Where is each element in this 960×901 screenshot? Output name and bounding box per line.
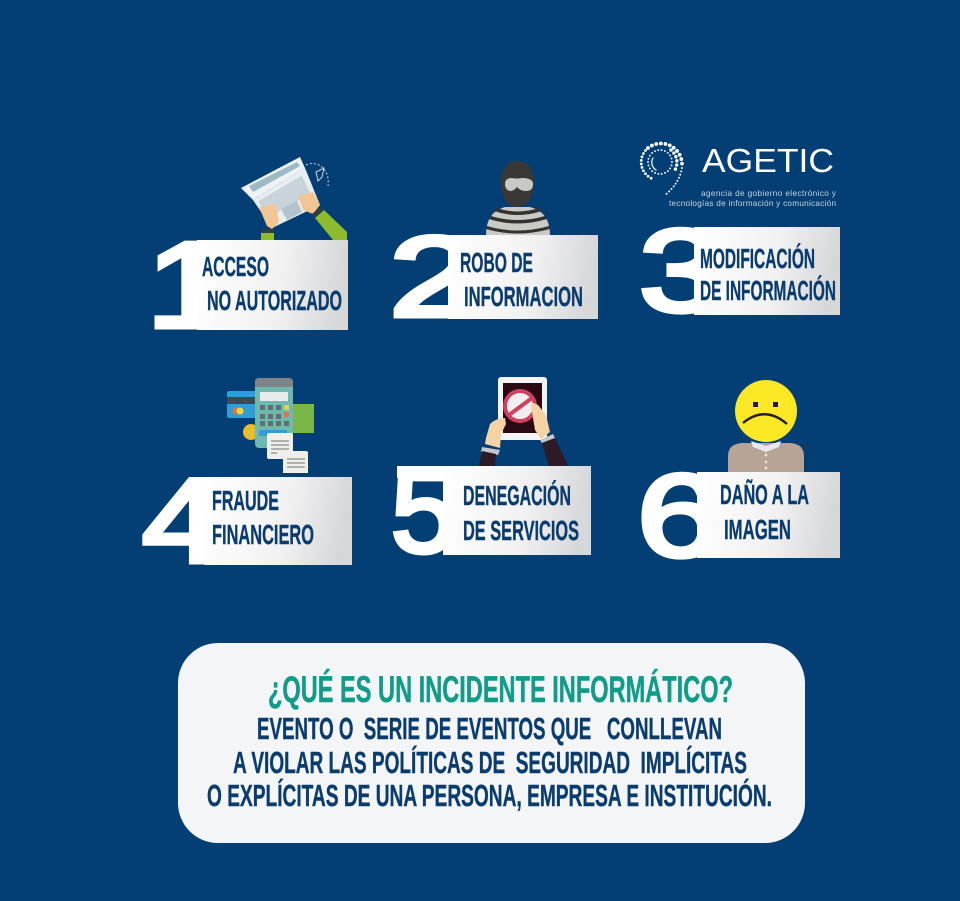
label panel 6 [697,472,840,558]
label text 6 [720,479,809,545]
label text 2: INFORMACION [464,281,583,312]
icon: laptop with hands [241,157,347,240]
label text 1: NO AUTORIZADO [207,285,342,316]
label text 3 [700,243,836,306]
label text 3: MODIFICACIÓN [700,243,815,274]
icon: sad face person [728,380,804,472]
label text 1 [202,251,342,316]
label text 4 [212,485,314,550]
label text 6: IMAGEN [724,514,791,545]
definition body [207,711,772,813]
label panel 2 [448,235,598,319]
top bar of number 5 [397,466,444,478]
label text 2: ROBO DE [460,247,533,278]
logo tagline: tecnologías de información y comunicación [669,199,836,208]
logo: AGETIC [641,142,837,208]
logo wordmark: AGETIC [702,142,834,179]
label text 2 [460,247,583,312]
item 6: dano a la imagen [637,380,840,581]
logo tagline [669,189,837,208]
icon: payment terminal [227,378,314,473]
label panel 1 [197,240,348,330]
label panel 3 [694,227,840,315]
label panel 5 [443,466,591,555]
label text 6: DAÑO A LA [720,479,809,510]
label text 1: ACCESO [202,251,269,282]
item 5: denegacion de servicios [391,377,591,578]
item 3: modificacion de informacion [639,205,840,336]
number 5: 5 [391,445,457,578]
label text 5: DENEGACIÓN [463,480,571,511]
number 4: 4 [142,454,222,588]
label text 3: DE INFORMACIÓN [700,275,836,306]
number 2: 2 [389,214,479,341]
definition background [178,643,805,843]
item 1: acceso no autorizado [146,157,348,353]
number 3: 3 [639,205,723,336]
logo mark: dotted spiral [641,143,682,195]
item 2: robo de informacion [389,161,598,341]
label text 5: DE SERVICIOS [463,515,579,546]
logo tagline: agencia de gobierno electrónico y [701,189,837,198]
item 4: fraude financiero [142,378,352,588]
label text 4: FRAUDE [212,485,279,516]
number 1: 1 [146,217,231,353]
label panel 4 [204,477,352,565]
number 6: 6 [637,450,721,581]
label text 4: FINANCIERO [212,519,314,550]
icon: thief [486,161,550,235]
label text 5 [463,480,579,546]
icon: tablet with blocked screen [479,377,568,466]
panel: definition [178,643,805,843]
